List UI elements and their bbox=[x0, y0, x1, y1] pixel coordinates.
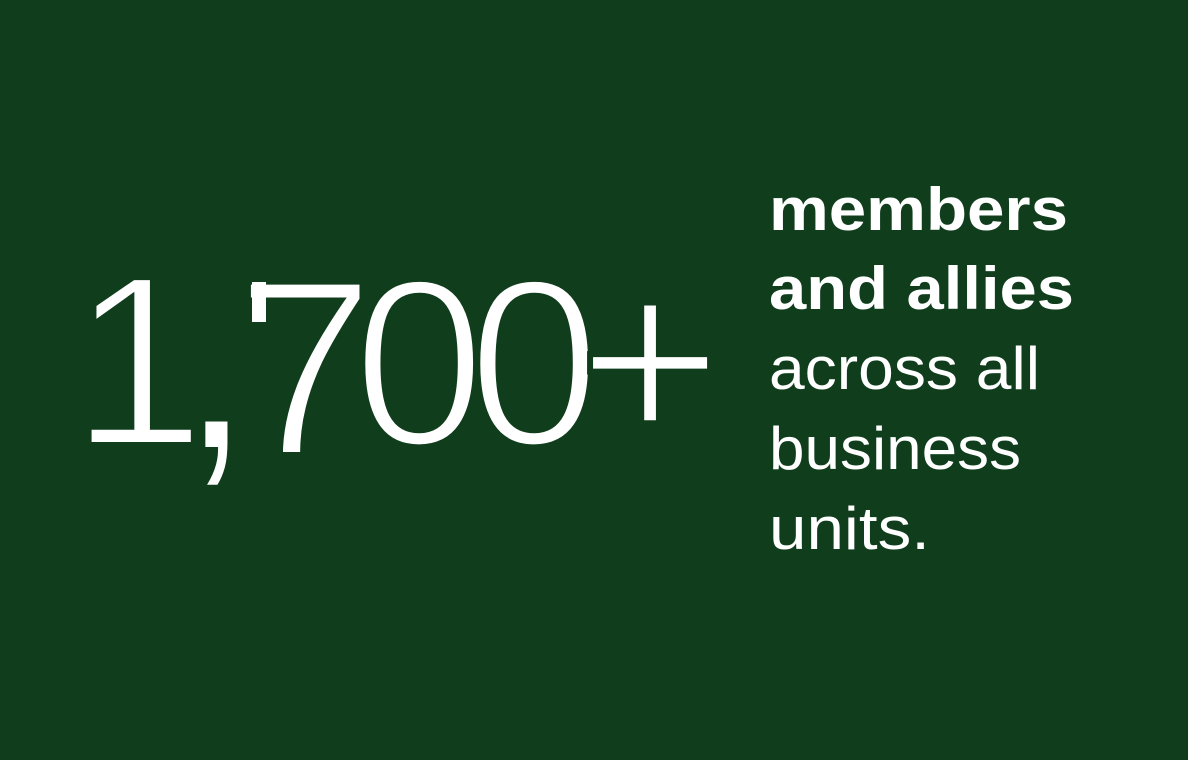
big number: 1,700+: , bbox=[175, 183, 257, 513]
description text bbox=[769, 176, 1074, 562]
description text: across all bbox=[769, 335, 1040, 402]
description text: business bbox=[769, 415, 1021, 482]
big number: 1,700+: 1 bbox=[70, 224, 206, 497]
big number: 1,700+: 0 bbox=[353, 231, 485, 496]
big number: 1,700+: 7 bbox=[235, 228, 375, 509]
description text: members bbox=[769, 176, 1068, 243]
big number: 1,700+: + bbox=[578, 222, 722, 498]
big number: 1,700+ bbox=[70, 183, 722, 513]
description text: units. bbox=[769, 495, 930, 562]
big number: 1,700+: 0 bbox=[468, 231, 600, 496]
description text: and allies bbox=[769, 255, 1074, 322]
